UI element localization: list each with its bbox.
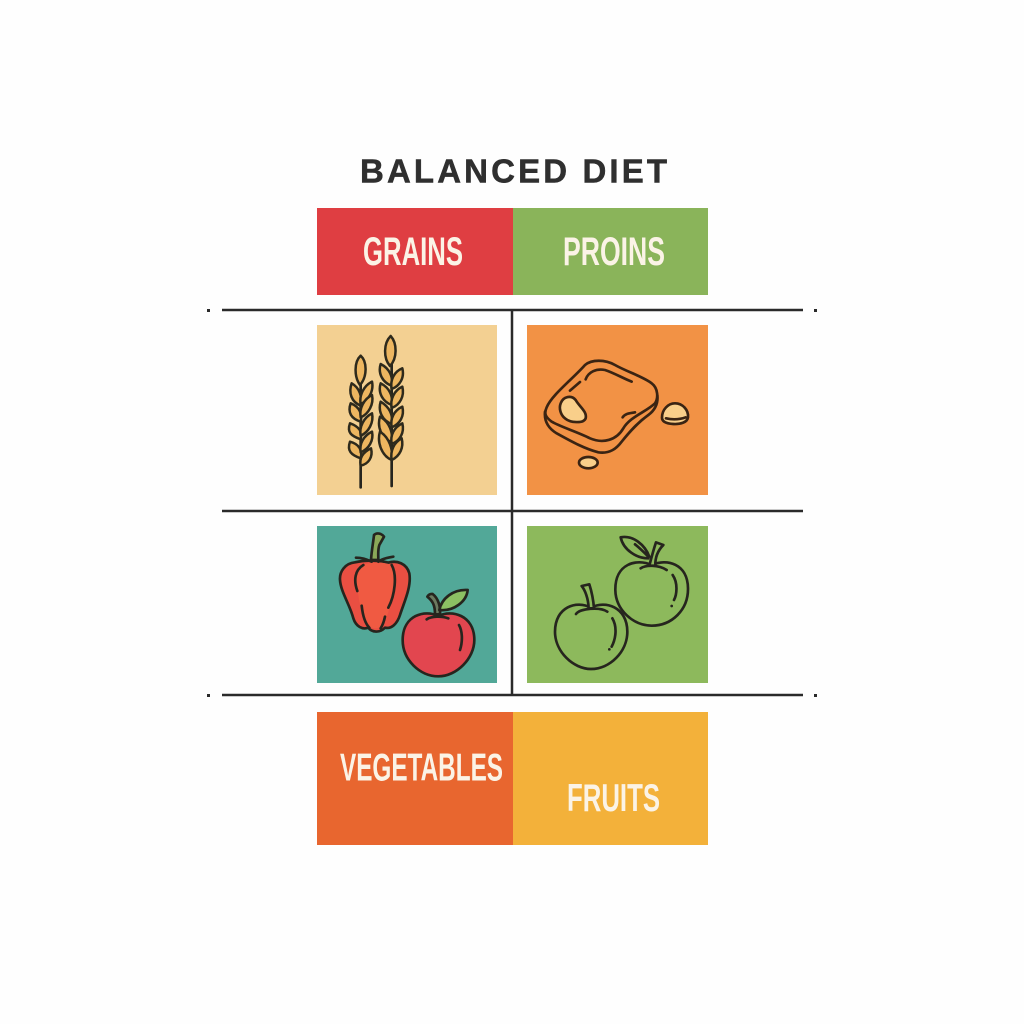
panel: pepper and apple [317,526,497,683]
panel: wheat [317,325,497,495]
footer bar: fruits: FRUITS [567,777,660,820]
icon: two wheat stalks [349,336,403,487]
header bar: proins [513,208,708,295]
header bar: grains [317,208,513,295]
grid lines and markers [207,309,817,697]
icon: upper green apple [615,537,688,626]
panel: green apples [527,526,708,683]
footer bar: fruits [513,712,708,845]
footer bar: vegetables [317,712,513,845]
icon: red apple [403,590,474,676]
title: BALANCED DIET [360,152,667,190]
icon: lower green apple [555,584,627,669]
footer bar: vegetables: VEGETABLES [340,746,503,790]
icon: red bell pepper [340,533,410,632]
header bar: grains: GRAINS [363,230,463,274]
header bar: proins: PROINS [563,230,665,274]
panel: bread and nuts [527,325,708,495]
icon: bread slice with nuts [545,361,688,468]
